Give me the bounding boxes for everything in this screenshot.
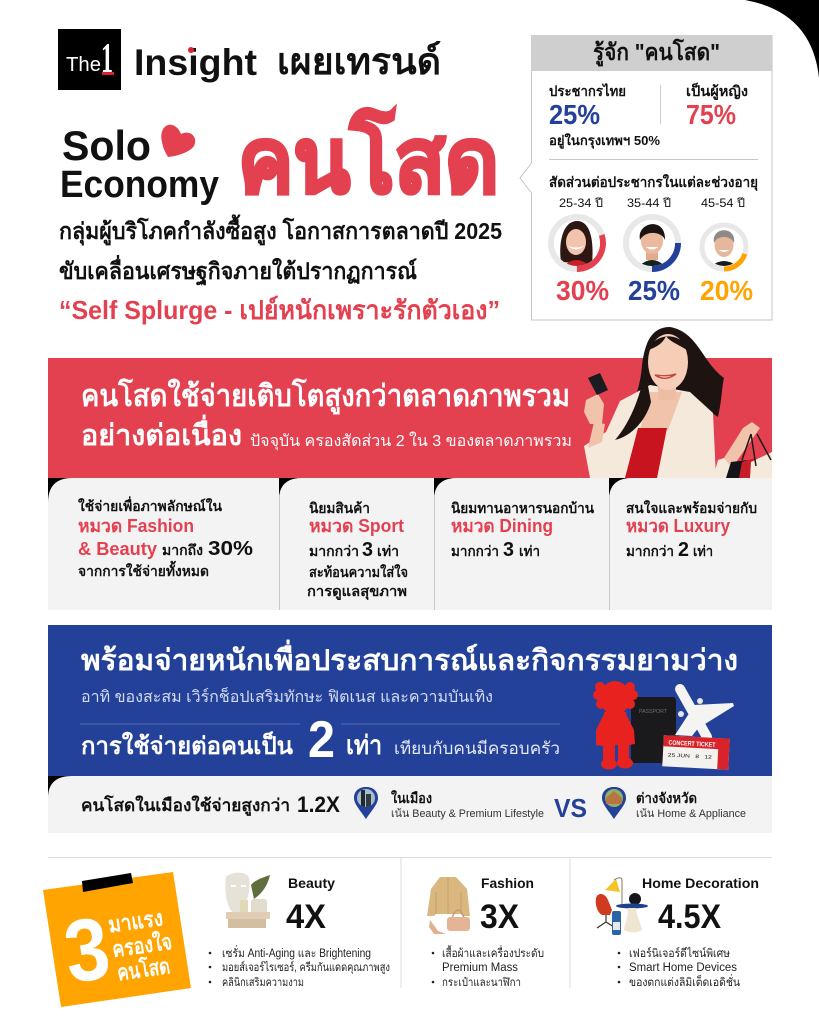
- card: Luxury: หมวด Luxury: [626, 516, 730, 536]
- spending statement: 2x: เท่า: [346, 730, 382, 760]
- spending statement: 2x: 2: [308, 711, 335, 769]
- card: Fashion and Beauty: [48, 478, 279, 610]
- stat: female share: [686, 82, 748, 130]
- age group 35-44: 25%: [628, 275, 680, 306]
- Home Decoration bullet list: Smart Home Devices: [629, 962, 737, 974]
- trend: Beauty: [209, 873, 390, 989]
- card: Fashion and Beauty: & Beauty: [78, 539, 157, 559]
- age group 25-34: 25-34 ปี: [559, 196, 603, 210]
- blue banner heading: พร้อมจ่ายหนักเพื่อประสบการณ์และกิจกรรมยามว่าง: [81, 639, 738, 677]
- card: Fashion and Beauty: ใช้จ่ายเพื่อภาพลักษณ์ใน: [78, 496, 222, 514]
- card: Sport: หมวด Sport: [309, 516, 404, 536]
- card: Dining: หมวด Dining: [451, 516, 553, 536]
- age group 35-44: [625, 196, 680, 306]
- spending statement: 2x: เทียบกับคนมีครอบครัว: [394, 739, 560, 758]
- card: Sport: [279, 478, 434, 610]
- concert ticket: [662, 735, 730, 770]
- card: Fashion and Beauty: มากถึง: [162, 542, 203, 558]
- panel: urban vs provincial: [48, 776, 772, 833]
- panel: blue experience banner: [48, 625, 772, 777]
- logo: The 1: [58, 29, 121, 90]
- logo: The 1: The: [66, 54, 101, 76]
- card: Luxury: มากกว่า: [626, 543, 674, 559]
- age group 45-54: [700, 196, 753, 306]
- provincial label: ต่างจังหวัด: [636, 790, 697, 806]
- icon: provincial pin: [602, 787, 626, 819]
- Beauty bullet list: [209, 945, 390, 989]
- urban label: เน้น Beauty & Premium Lifestyle: [391, 808, 544, 820]
- urban spending statement: คนโสดในเมืองใช้จ่ายสูงกว่า: [81, 795, 290, 817]
- stat: Thai population: 25%: [549, 99, 600, 130]
- subtitle text block: ขับเคลื่อนเศรษฐกิจภายใต้ปรากฏการณ์: [59, 254, 417, 286]
- age group 25-34: [550, 196, 609, 306]
- banner subheading: [81, 414, 572, 452]
- passport: PASSPORT: [639, 709, 667, 715]
- VS label: VS: [554, 793, 587, 823]
- black corner decoration: [745, 0, 819, 78]
- subtitle text block: [59, 214, 502, 325]
- stat: female share: 75%: [686, 99, 736, 130]
- trend: Home Decoration: 4.5X: [658, 898, 721, 936]
- card: Fashion and Beauty: 30%: [208, 538, 253, 560]
- card: Sport: 3: [362, 539, 373, 561]
- card: Fashion and Beauty: หมวด Fashion: [78, 516, 194, 536]
- red collectible figure: [593, 681, 638, 770]
- stat: Thai population: [549, 82, 660, 149]
- heading: Insight เผยเทรนด์: [134, 41, 441, 83]
- urban label: ในเมือง: [391, 789, 432, 806]
- banner subheading: ปัจจุบัน ครองสัดส่วน 2 ใน 3 ของตลาดภาพรวม: [250, 431, 572, 451]
- provincial label: เน้น Home & Appliance: [636, 808, 746, 820]
- card: Dining: นิยมทานอาหารนอกบ้าน: [451, 500, 594, 516]
- card: Sport: มากกว่า: [309, 543, 359, 559]
- age group 45-54: 20%: [700, 275, 753, 306]
- card: Luxury: [609, 478, 772, 610]
- stat: Thai population: อยู่ในกรุงเทพฯ 50%: [549, 132, 660, 149]
- banner subheading: อย่างต่อเนื่อง: [81, 414, 242, 452]
- logo: The 1: 1: [101, 36, 113, 82]
- card: Dining: มากกว่า: [451, 543, 499, 559]
- stat: female share: เป็นผู้หญิง: [686, 82, 748, 100]
- panel: รู้จักคนโสด: [520, 35, 772, 320]
- age group 35-44: 35-44 ปี: [627, 196, 671, 210]
- title: Solo Economy คนโสด: Economy: [60, 164, 219, 206]
- sticky note: 3 มาแรง ครองใจ คนโสด: [43, 872, 191, 1007]
- card: Luxury: 2: [678, 539, 689, 561]
- subtitle text block: กลุ่มผู้บริโภคกำลังซื้อสูง โอกาสการตลาดปี 2025: [59, 214, 502, 246]
- card: Dining: 3: [503, 539, 514, 561]
- urban label: [391, 789, 544, 820]
- icon: city pin: [354, 787, 378, 819]
- card: Dining: เท่า: [519, 543, 540, 559]
- sticky note: 3 มาแรง ครองใจ คนโสด: มาแรง: [107, 905, 165, 938]
- Fashion bullet list: กระเป๋าและนาฬิกา: [442, 976, 521, 989]
- age section heading: สัดส่วนต่อประชากรในแต่ละช่วงอายุ: [549, 173, 758, 191]
- card: Luxury: เท่า: [693, 543, 713, 559]
- card: Sport: เท่า: [377, 543, 399, 559]
- passport: [631, 697, 676, 763]
- urban spending statement: 1.2X: [297, 792, 340, 817]
- trend: Fashion: 3X: [480, 898, 519, 936]
- trend: Fashion: [427, 875, 544, 989]
- age group 45-54: 45-54 ปี: [701, 196, 745, 210]
- Home Decoration bullet list: เฟอร์นิเจอร์ดีไซน์พิเศษ: [629, 946, 730, 960]
- title: Solo Economy คนโสด: คนโสด: [238, 108, 499, 212]
- card: Luxury: สนใจและพร้อมจ่ายกับ: [626, 499, 757, 516]
- header: logo and Insight title: [58, 29, 441, 90]
- provincial label: [636, 790, 746, 820]
- stat: Thai population: ประชากรไทย: [549, 82, 626, 99]
- trend: Home Decoration: [596, 875, 759, 989]
- Beauty bullet list: เซรั่ม Anti-Aging และ Brightening: [222, 945, 371, 960]
- spending statement: 2x: [81, 711, 560, 769]
- panel heading: รู้จัก "คนโสด": [593, 38, 720, 67]
- card: Dining: [434, 478, 609, 610]
- title: Solo Economy คนโสด: Solo: [62, 122, 151, 169]
- sticky note: 3 มาแรง ครองใจ คนโสด: คนโสด: [115, 952, 172, 985]
- Beauty bullet list: คลินิกเสริมความงาม: [222, 976, 304, 989]
- panel: red banner: [48, 327, 772, 479]
- Fashion bullet list: [432, 945, 544, 989]
- panel: category cards: [48, 478, 772, 610]
- age group 25-34: 30%: [556, 275, 609, 306]
- illustration: collectibles, passport, plane, ticket: [593, 681, 734, 770]
- card: Sport: สะท้อนความใส่ใจ: [309, 563, 408, 580]
- trend: Beauty: 4X: [286, 898, 326, 936]
- trend: Home Decoration: Home Decoration: [642, 875, 759, 891]
- heading: Insight เผยเทรนด์: Insight: [134, 42, 257, 83]
- airplane: [675, 689, 734, 737]
- icon: jacket, bag and shoe: [427, 877, 470, 934]
- icon: face mask and plant: [225, 873, 270, 928]
- card: Sport: การดูแลสุขภาพ: [307, 583, 407, 600]
- urban spending statement: [81, 792, 340, 817]
- blue banner description: อาทิ ของสะสม เวิร์กช็อปเสริมทักษะ ฟิตเนส และความบันเทิง: [81, 686, 493, 706]
- Fashion bullet list: Premium Mass: [442, 962, 518, 974]
- Beauty bullet list: มอยส์เจอร์ไรเซอร์, ครีมกันแดดคุณภาพสูง: [222, 960, 390, 974]
- sticky note: 3 มาแรง ครองใจ คนโสด: 3: [58, 898, 116, 1002]
- icon: lamp, chair and table: [596, 878, 648, 935]
- trend: Fashion: Fashion: [481, 875, 534, 891]
- icon: heart: [161, 125, 195, 157]
- sticky note: 3 มาแรง ครองใจ คนโสด: ครองใจ: [110, 928, 174, 962]
- Home Decoration bullet list: ของตกแต่งลิมิเต็ดเอดิชั่น: [629, 974, 740, 989]
- banner heading: คนโสดใช้จ่ายเติบโตสูงกว่าตลาดภาพรวม: [81, 377, 570, 415]
- trend: Beauty: Beauty: [288, 875, 335, 891]
- card: Fashion and Beauty: จากการใช้จ่ายทั้งหมด: [78, 560, 209, 579]
- title: Solo Economy คนโสด: [60, 108, 499, 212]
- subtitle text block: “Self Splurge - เปย์หนักเพราะรักตัวเอง”: [59, 295, 500, 325]
- heading: Insight เผยเทรนด์: เผยเทรนด์: [277, 41, 441, 82]
- card: Sport: นิยมสินค้า: [309, 500, 370, 516]
- woman with card and shopping bags: [584, 327, 772, 478]
- concert ticket: CONCERT TICKET: [668, 740, 716, 749]
- concert ticket: 25 JUN 8 12: [668, 753, 712, 761]
- spending statement: 2x: การใช้จ่ายต่อคนเป็น: [81, 731, 294, 760]
- Fashion bullet list: เสื้อผ้าและเครื่องประดับ: [442, 945, 544, 960]
- Home Decoration bullet list: [618, 946, 740, 989]
